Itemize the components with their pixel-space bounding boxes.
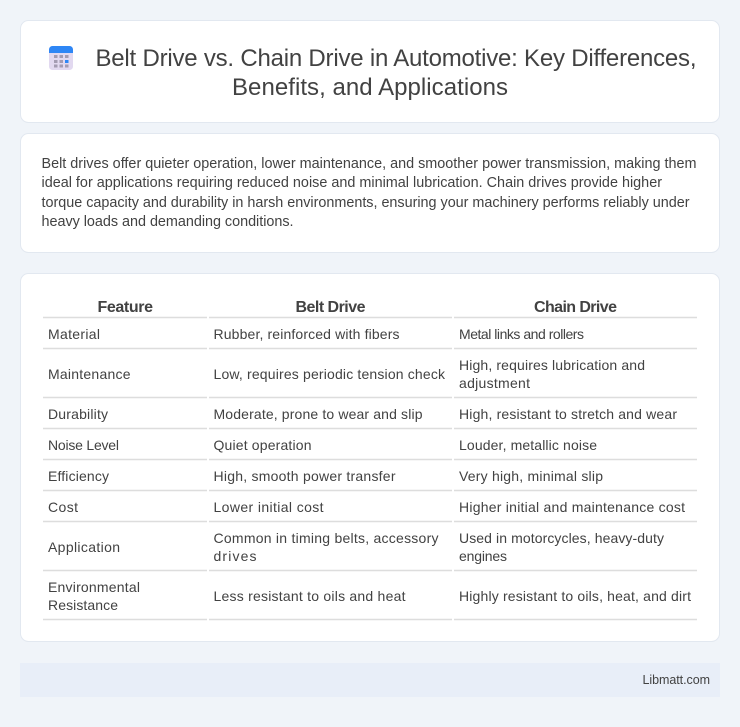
row: material: Material bbox=[48, 326, 100, 342]
panel: title card bbox=[20, 20, 720, 122]
panel: summary text: Belt drives offer quieter operation, lower maintenance, and smoother power transmission, making them bbox=[42, 156, 696, 172]
row: noise level: Quiet operation bbox=[214, 437, 312, 453]
row: durability: Durability bbox=[48, 406, 108, 422]
row: material: Rubber, reinforced with fibers bbox=[214, 326, 400, 342]
row: efficiency: Very high, minimal slip bbox=[459, 468, 603, 484]
row: application: Common in timing belts, accessory bbox=[214, 530, 438, 546]
title: Belt Drive vs. Chain Drive in Automotive: Key Differences, bbox=[96, 45, 696, 72]
row: environmental resistance: Highly resistant to oils, heat, and dirt bbox=[459, 588, 691, 604]
icon: calendar bbox=[49, 46, 73, 70]
row: noise level: Louder, metallic noise bbox=[459, 437, 597, 453]
row: environmental resistance: Environmental bbox=[48, 579, 140, 595]
table header: Chain Drive bbox=[534, 299, 617, 316]
row: maintenance bbox=[48, 357, 645, 391]
row: durability bbox=[48, 406, 677, 422]
row: environmental resistance: Less resistant to oils and heat bbox=[214, 588, 406, 604]
panel: summary text: heavy loads and demanding conditions. bbox=[42, 214, 294, 230]
row: material bbox=[48, 326, 584, 342]
table header bbox=[98, 299, 617, 316]
row: cost: Cost bbox=[48, 499, 78, 515]
row: durability: Moderate, prone to wear and slip bbox=[214, 406, 423, 422]
row: application bbox=[48, 530, 664, 564]
row: efficiency: Efficiency bbox=[48, 468, 109, 484]
row: material: Metal links and rollers bbox=[459, 326, 584, 342]
row: efficiency: High, smooth power transfer bbox=[214, 468, 396, 484]
row: durability: High, resistant to stretch and wear bbox=[459, 406, 677, 422]
row: maintenance: Maintenance bbox=[48, 366, 131, 382]
row: maintenance: High, requires lubrication and bbox=[459, 357, 645, 373]
row: application: drives bbox=[214, 548, 256, 564]
row: environmental resistance bbox=[48, 579, 691, 613]
row: noise level bbox=[48, 437, 597, 453]
panel: summary text: ideal for applications requiring reduced noise and minimal lubrication. Chain drives provide higher bbox=[42, 175, 662, 191]
row: noise level: Noise Level bbox=[48, 437, 119, 453]
row: maintenance: adjustment bbox=[459, 375, 530, 391]
row: maintenance: Low, requires periodic tension check bbox=[214, 366, 446, 382]
footer bbox=[20, 663, 720, 697]
panel: comparison table bbox=[20, 274, 720, 642]
row: cost: Higher initial and maintenance cost bbox=[459, 499, 685, 515]
row: application: engines bbox=[459, 548, 507, 564]
row: application: Application bbox=[48, 539, 120, 555]
panel: summary text bbox=[20, 134, 720, 252]
row: application: Used in motorcycles, heavy-duty bbox=[459, 530, 664, 546]
title: Benefits, and Applications bbox=[232, 74, 508, 101]
row: environmental resistance: Resistance bbox=[48, 597, 118, 613]
row: cost bbox=[48, 499, 685, 515]
row: efficiency bbox=[48, 468, 603, 484]
table header: Belt Drive bbox=[296, 299, 366, 316]
panel: summary text: torque capacity and durability in harsh environments, ensuring your machinery performs reliably under bbox=[42, 195, 690, 211]
table header: Feature bbox=[98, 299, 153, 316]
footer: Libmatt.com bbox=[642, 673, 710, 687]
row: cost: Lower initial cost bbox=[214, 499, 324, 515]
title bbox=[96, 45, 696, 101]
